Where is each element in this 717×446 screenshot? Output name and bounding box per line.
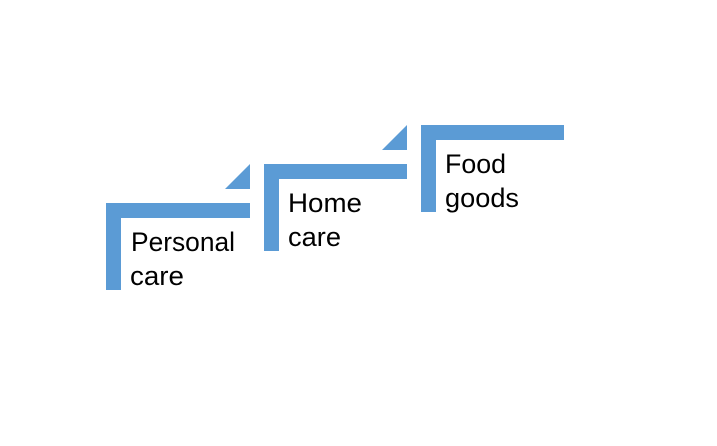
icon: step 2 corner triangle bbox=[382, 125, 407, 150]
step 2: Home care bbox=[264, 125, 407, 252]
icon: step 2 bent bracket bbox=[264, 164, 407, 251]
label: Home care: care bbox=[288, 222, 341, 252]
icon: step 1 corner triangle bbox=[225, 164, 250, 189]
label: Food goods: Food bbox=[445, 149, 506, 179]
label: Personal care: care bbox=[130, 261, 184, 291]
icon: step 1 bent bracket bbox=[106, 203, 250, 290]
step 1: Personal care bbox=[106, 164, 250, 291]
icon: step 3 bent bracket bbox=[421, 125, 564, 212]
label: Personal care: Personal bbox=[131, 227, 235, 257]
step 3: Food goods bbox=[421, 125, 564, 213]
label: Food goods: goods bbox=[445, 183, 519, 213]
label: Home care: Home bbox=[288, 188, 362, 218]
